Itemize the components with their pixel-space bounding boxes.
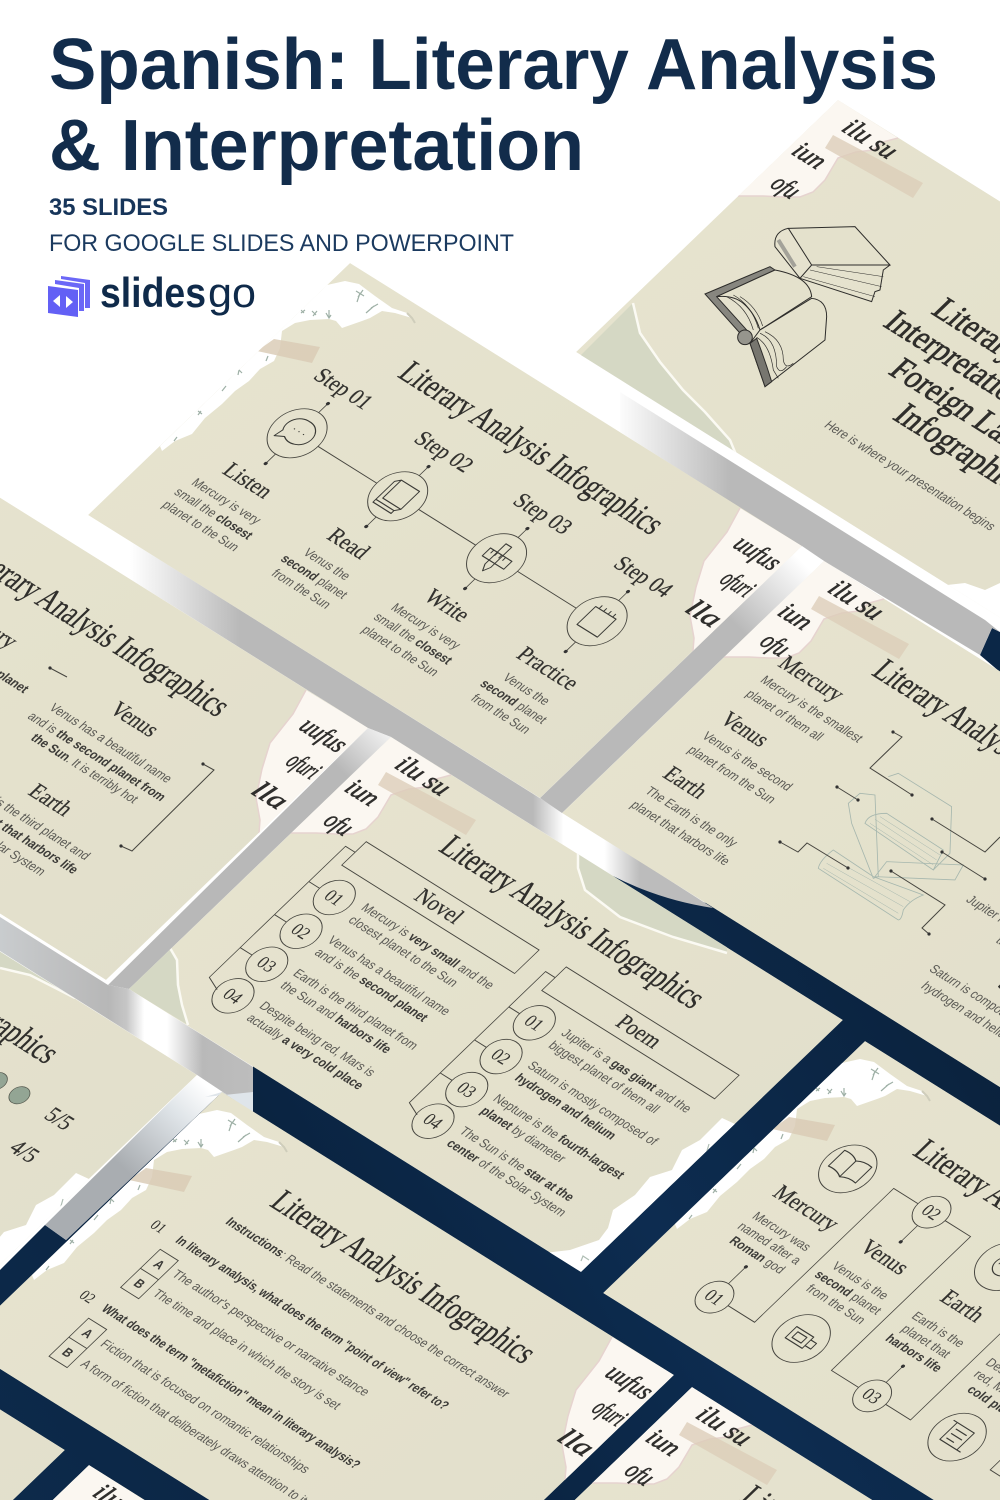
quiz content: The author's perspective or narrative stance [169,1267,373,1399]
novel slide content: closest planet to the Sun [345,913,461,990]
timeline content: Venus [855,1234,916,1279]
mercury slide text: Earth [658,761,714,803]
step slide content: ofuri [714,566,761,603]
novel slide content: 04 [418,1109,448,1133]
novel slide content: of the Solar System [472,1155,570,1219]
slide: mercury venus earth with books diagram [562,561,1000,1096]
novel slide content: 02 [287,919,316,943]
mercury slide text: ofu [754,628,796,662]
step slide content: Practice [511,642,586,695]
timeline content: from the Sun [803,1282,869,1327]
step slide content: Venus the [500,671,553,708]
bottom right text: ofu [618,1457,661,1491]
step slide content: planet [311,573,351,602]
step slide content: planet [510,698,551,727]
step slide content: from the Sun [268,567,334,612]
novel slide content: planet [477,1104,517,1133]
shadow: under step slide [130,541,613,876]
quiz content: 01 [146,1218,170,1237]
left slide text: and is the second planet from [24,709,169,804]
quiz content: B [130,1276,148,1291]
novel slide content: center [443,1137,483,1165]
slide: small left with ratings [0,952,197,1264]
step slide content: uufus [727,531,788,576]
novel slide content: Literary Analysis Infographics [431,829,714,1016]
novel slide content: 03 [252,952,282,976]
novel slide content: and is the second planet [311,946,431,1024]
slide: quiz [0,1092,674,1500]
cover title: iun [785,137,833,174]
bottom right text: iun [639,1424,687,1461]
quiz content: Literary Analysis Infographics [262,1184,545,1371]
step slide content: Read [322,523,376,564]
cover title: ilu su [836,114,904,164]
left slide text: the Sun. It is terribly hot [28,731,142,806]
timeline content: Earth is the [908,1309,968,1350]
cover green torn corner [573,303,1000,632]
timeline content [694,1138,1000,1476]
quiz content: lla [551,1424,600,1462]
slide count: 35 SLIDES [49,194,168,221]
mercury slide text: The Earth is the only [642,784,741,850]
platform line: FOR GOOGLE SLIDES AND POWERPOINT [49,230,514,257]
left slide text: Venus has a beautiful name [46,701,175,786]
novel slide content: 02 [487,1045,516,1068]
step slide content: lla [679,595,728,633]
shadow: between small slide and quiz slide [45,1075,222,1240]
novel slide content: Despite being red, Mars is [256,999,379,1079]
timeline content: planet that [898,1322,954,1361]
novel slide content: 01 [320,886,349,909]
slide: step timeline [88,263,802,798]
step slide content: from the Sun [468,691,534,736]
novel slide content: hydrogen and helium [511,1071,620,1142]
mercury slide text: planet from the Sun [684,743,779,806]
logo icon [48,276,90,317]
diagram connectors [778,730,1000,936]
slide: venus earth left [0,445,368,980]
novel slide content: 01 [520,1011,549,1035]
novel slide content: iun [338,774,386,811]
left slide text [0,564,346,876]
left slide text: uufus [293,713,354,758]
timeline content: 02 [917,1200,946,1224]
novel slide content: Venus has a beautiful name [324,933,454,1018]
logo wordmark: go [208,269,256,316]
step slide content: second [277,552,322,584]
step slide content: Step 02 [409,426,480,477]
timeline content: Roman [726,1234,770,1265]
pale books illustration [818,773,963,920]
mercury slide text: Mercury [773,650,852,706]
bottom right text [624,1406,775,1500]
mercury slide text: iun [771,598,819,635]
slide: bottom far left [0,1409,65,1500]
shadow: pale patch [205,1092,253,1112]
mercury slide text: planet of them all [743,687,827,744]
slide: bottom left [52,1465,145,1500]
header title line two: & Interpretation [49,106,584,186]
step slide content: Write [419,584,477,627]
step slide content: second [477,677,521,708]
step slide content: Mercury is very [388,601,464,652]
timeline content: Mercury was [749,1209,814,1254]
novel slide content: 04 [218,984,248,1008]
shadow: under mercury slide curling over navy [605,839,713,908]
quiz content: What does the term "metafiction" mean in literary analysis? [98,1302,364,1472]
slide: mercury venus earth timeline [603,1041,1000,1500]
novel slide content: ilu su [389,751,457,801]
header title: Spanish: Literary Analysis [49,25,938,105]
slide: bottom right [574,1387,872,1500]
step slide content: small the closest [171,485,256,542]
slide: novel and poem [129,737,843,1272]
quiz content: Fiction that is focused on romantic relationships [97,1337,313,1476]
novel slide content: Neptune is the fourth-largest [490,1092,628,1182]
novel slide content: ofu [317,807,360,841]
novel slide content: 03 [452,1078,482,1101]
timeline content: 03 [858,1384,887,1408]
left slide text: lla [245,777,294,815]
cover books illustration [705,227,890,387]
quiz content: 02 [75,1288,99,1307]
novel slide content: Jupiter is a gas giant and the [558,1026,695,1116]
quiz content: A [150,1257,168,1272]
quiz content: B [59,1345,77,1360]
navy corner at right [980,628,1000,672]
shadow: between step and mercury slides [540,546,824,813]
novel slide green patches [129,853,727,1025]
step slide content: planet to the Sun [159,498,243,554]
novel slide content [208,756,740,1217]
step slide content: Step 01 [308,363,379,414]
mercury slide text: Venus [715,706,776,751]
step slide content [160,360,780,734]
step slide content: Literary Analysis Infographics [390,355,673,542]
novel slide content: the Sun and harbors life [277,979,395,1056]
timeline content: second [811,1268,856,1299]
background: navy backdrop [0,876,1000,1500]
quiz content: A [78,1326,96,1341]
slide: cover [573,100,1000,635]
small slide content: 4/5 [4,1135,45,1167]
quiz content: The time and place in which the story is set [150,1287,345,1413]
timeline content: Mercury [768,1180,846,1236]
logo wordmark: slides [100,269,206,316]
left slide text: Venus [105,697,166,741]
timeline content: god [759,1254,788,1276]
step slide content: small the closest [370,610,456,667]
timeline content: 01 [700,1285,729,1309]
novel slide content: by diameter [505,1122,569,1165]
step slide content: Step 04 [608,551,679,602]
step slide content: Venus the [300,546,354,583]
quiz content: uufus [599,1360,660,1405]
cover title: ofu [764,170,807,204]
mercury slide text [628,580,1000,1038]
mercury slide text: Venus is the second [699,729,796,794]
small slide content: 5/5 [39,1102,80,1135]
left slide text: ofuri [280,748,327,785]
left slide bracket [48,666,214,851]
timeline content: Earth [935,1285,991,1327]
shadow: below left slide [0,917,253,1112]
quiz content: ofuri [586,1395,633,1432]
cover title [770,120,1000,530]
novel slide content: Saturn is mostly composed of [524,1059,661,1148]
novel slide content: Novel [409,883,470,928]
mercury slide text: Mercury is the smallest [757,673,866,745]
quiz content [48,1189,652,1500]
novel slide content: Earth is the third planet from [290,966,421,1053]
novel slide content: Mercury is very small and the [358,901,498,992]
novel slide content: Poem [610,1010,669,1053]
timeline content: named after a [734,1220,805,1267]
left slide text: Earth [23,779,79,821]
quiz content: In literary analysis, what does the term "point of view" refer to? [172,1233,452,1412]
step slide content: planet to the Sun [358,623,442,679]
bottom right text: ilu su [690,1401,758,1451]
shadow: under cover slide [620,392,1000,655]
small slide content [0,1017,75,1162]
quiz content: Instructions: Read the statements and choose the correct answer [222,1215,513,1401]
novel slide content: The Sun is the star at the [456,1124,578,1204]
timeline content: harbors life [882,1332,945,1375]
small slide green patch [0,951,75,998]
step slide content: Mercury is very [188,476,264,527]
step slide content: Step 03 [508,488,579,539]
cover title: Here is where your presentation begins [821,418,999,533]
mercury slide text: ilu su [822,575,890,625]
timeline content: planet [845,1289,885,1318]
novel slide content: actually a very cold place [243,1011,367,1092]
novel slide content: biggest planet of them all [545,1039,663,1116]
mercury slide text: planet that harbors life [627,798,733,868]
timeline content: Venus is the [829,1259,892,1302]
step slide content: Listen [217,458,279,503]
shadow: between left and novel slides [108,728,391,989]
